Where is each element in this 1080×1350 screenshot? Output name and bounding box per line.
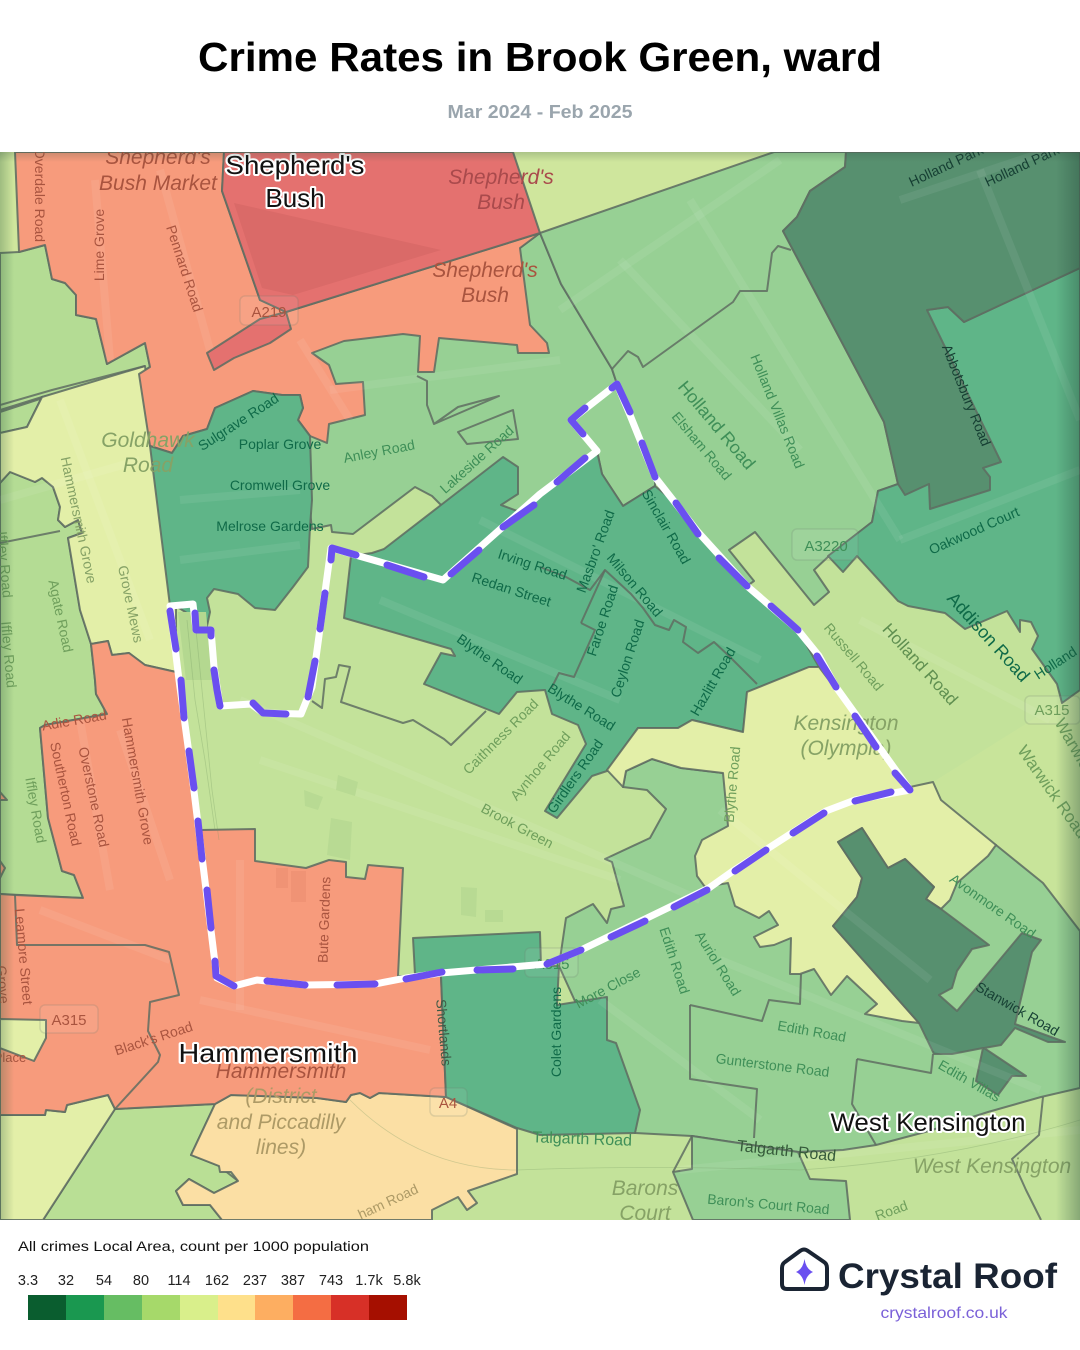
map place and road labels: Goldhawk (101, 429, 196, 452)
legend scale labels: 3.3 (18, 1273, 38, 1289)
area: Colet Gardens teal (413, 932, 640, 1135)
map place and road labels: ham Road (355, 1181, 421, 1222)
map place and road labels: Holland Road (674, 377, 759, 473)
map place and road labels: Hammersmith Grove (58, 455, 100, 585)
map place and road labels: Talgarth Road (736, 1138, 837, 1165)
map place and road labels: Masbro' Road (573, 508, 618, 595)
area: bottom left light green (43, 1104, 238, 1220)
map place and road labels: Iffley Road (22, 776, 50, 844)
map place and road labels: Faroe Road (583, 583, 621, 658)
map place and road labels: Shepherd's (432, 259, 538, 282)
map place and road labels: Girdlers Road (544, 736, 606, 816)
map place and road labels: A4 (439, 1095, 457, 1112)
area: Avonmore dark green (833, 828, 1065, 1095)
map place and road labels: Overstone Road (75, 745, 112, 848)
area: south central green (559, 759, 1080, 1152)
map place and road labels: Blythe Road (545, 680, 618, 734)
map place and road labels: A219 (251, 304, 287, 321)
map place and road labels: Ceylon Road (607, 617, 647, 699)
map place and road labels: Leamore Street (12, 908, 36, 1005)
map place and road labels: Grove Mews (115, 564, 147, 644)
map place and road labels: Elsham Road (669, 408, 735, 483)
map place and road labels: Cromwell Grove (230, 477, 330, 493)
map place and road labels: (District (245, 1085, 318, 1108)
map place and road labels: More Close (572, 964, 643, 1011)
map place and road labels: Road (873, 1197, 910, 1224)
map place and road labels: Pennard Road (163, 223, 206, 314)
map place and road labels: Sinclair Road (639, 486, 694, 567)
ward boundary: Brook Green (170, 384, 910, 986)
area: Barons Court green (673, 1136, 850, 1220)
legend scale labels: 80 (133, 1273, 149, 1289)
map place and road labels: Brook Green (479, 800, 556, 851)
map place and road labels: Stanwick Road (973, 978, 1062, 1039)
map place and road labels: Talgarth Road (532, 1129, 632, 1150)
map place and road labels: Addison Road (943, 588, 1034, 686)
map place and road labels: Oakwood Court (926, 503, 1022, 558)
legend scale labels: 5.8k (393, 1273, 421, 1289)
map place and road labels: Aynhoe Road (507, 728, 573, 803)
map place and road labels: Bute Gardens (315, 876, 334, 963)
map place and road labels: Bush Market (99, 172, 218, 195)
map place and road labels: Shepherd's (448, 166, 554, 189)
map place and road labels: Bush (477, 191, 525, 214)
map place and road labels: Barons (612, 1177, 679, 1200)
map place and road labels: Hammersmith Grove (119, 716, 157, 846)
map place and road labels: Adie Road (41, 707, 108, 734)
area: Shepherd's Bush salmon (15, 152, 549, 453)
map place and road labels: Holland Road (879, 620, 962, 709)
map place and road labels: Holland Park (906, 141, 986, 190)
area: north central green (295, 233, 655, 534)
map place and road labels: and Piccadilly (217, 1111, 347, 1134)
map place and road labels: Edith Road (656, 925, 693, 996)
map place and road labels: Blythe Road (721, 746, 743, 823)
buildings and rail lines (178, 612, 1080, 1170)
legend colour bar (28, 1295, 407, 1320)
map place and road labels: Avonmore Road (947, 870, 1039, 941)
legend scale labels: 54 (96, 1273, 112, 1289)
area: west green (0, 245, 150, 410)
area: red patch (207, 312, 291, 370)
map place and road labels: Anley Road (342, 436, 416, 466)
map place and road labels: Edith Road (776, 1017, 847, 1045)
map place and road labels: Blythe Road (454, 630, 526, 687)
map place and road labels: Gunterstone Road (715, 1050, 830, 1080)
map place and road labels: Shepherd's (105, 146, 211, 169)
map place and road labels: Black's Road (112, 1018, 195, 1058)
map place and road labels: Holland Villas Road (747, 352, 808, 471)
map place and road labels: Bush (265, 183, 325, 213)
map place and road labels: Holland Park (982, 141, 1062, 190)
map place and road labels: Kensington (793, 712, 899, 735)
legend (18, 1238, 421, 1320)
logo wordmark: Crystal Roof (838, 1257, 1057, 1296)
map place and road labels: Melrose Gardens (216, 518, 324, 534)
area: Brook Green ward teal (344, 451, 819, 818)
map place and road labels: Hammersmith (216, 1060, 346, 1083)
logo url: crystalroof.co.uk (880, 1305, 1009, 1322)
map place and road labels: Abbotsbury Road (939, 342, 994, 448)
legend title: All crimes Local Area, count per 1000 population (18, 1238, 369, 1254)
map place and road labels: lines) (256, 1136, 306, 1159)
map place and road labels: Lakeside Road (437, 422, 517, 496)
legend scale labels (18, 1273, 421, 1289)
area: Holland Road green (540, 152, 898, 605)
map place and road labels: A315 (1034, 702, 1070, 719)
map place and road labels: Redan Street (470, 569, 553, 610)
map place and road labels: Hammersmith (178, 1038, 358, 1068)
map place and road labels: Colet Gardens (548, 987, 564, 1077)
area: pale Goldhawk Road (0, 366, 176, 672)
area: west green lower (0, 472, 107, 898)
area: Shepherd's Bush red (222, 152, 540, 312)
map place and road labels: (Olympia) (800, 737, 892, 760)
legend scale labels: 1.7k (355, 1273, 383, 1289)
area: Melrose Gardens teal (150, 391, 312, 626)
map edge shading (0, 152, 1080, 1220)
map place and road labels: Milson Road (604, 550, 666, 620)
legend scale labels: 237 (243, 1273, 267, 1289)
light road network (0, 140, 1080, 1170)
map place and road labels: Agate Road (45, 578, 76, 654)
area: Olympia pale yellow (607, 667, 996, 1023)
area: bottom left pale (0, 1095, 115, 1220)
map place and road labels: Overdale Road (32, 148, 48, 242)
title: Crime Rates in Brook Green, ward (198, 34, 882, 80)
map place and road labels: Southerton Road (47, 741, 85, 847)
map place and road labels: Hazlitt Road (687, 644, 739, 719)
map place and road labels: Holland (1031, 643, 1080, 682)
map place and road labels: A315 (534, 956, 570, 973)
map place and road labels: Irving Road (496, 546, 569, 583)
subtitle: date range: Mar 2024 - Feb 2025 (448, 102, 632, 122)
area: north east teal (828, 268, 1080, 703)
map place and road labels: Bush (461, 284, 509, 307)
map place and road labels: Caithness Road (460, 696, 541, 777)
legend scale labels: 162 (205, 1273, 229, 1289)
legend scale labels: 114 (167, 1273, 191, 1289)
map place and road labels: Sulgrave Road (195, 390, 281, 454)
map place and road labels: Edith Villas (936, 1056, 1003, 1105)
map place and road labels: West Kensington (830, 1109, 1026, 1137)
map place and road labels: Shortlands (433, 999, 455, 1067)
map place and road labels: Court (619, 1202, 672, 1225)
legend scale labels: 32 (58, 1273, 74, 1289)
map place and road labels: A3220 (804, 538, 848, 555)
icon: house with star (782, 1250, 827, 1289)
boundary lines (0, 246, 1043, 1220)
map place and road labels: West Kensington (913, 1155, 1071, 1178)
map place and road labels: Baron's Court Road (707, 1191, 830, 1217)
road shields (40, 296, 1080, 1116)
map place and road labels: Poplar Grove (239, 436, 321, 452)
map place and road labels: Russell Road (821, 620, 887, 694)
map place and road labels: Auriol Road (692, 928, 744, 999)
legend scale labels: 387 (281, 1273, 305, 1289)
area: peach Talgarth (176, 1093, 517, 1220)
area: Holland Park dark green (783, 152, 1080, 509)
map place and road labels: A315 (51, 1012, 87, 1029)
map place and road labels: Shepherd's (226, 150, 364, 180)
map place and road labels: Road (123, 454, 174, 477)
logo: Crystal Roof (782, 1250, 1057, 1322)
area: Hammersmith salmon (0, 641, 446, 1115)
map place and road labels: Lime Grove (91, 209, 107, 281)
legend scale labels: 743 (319, 1273, 343, 1289)
